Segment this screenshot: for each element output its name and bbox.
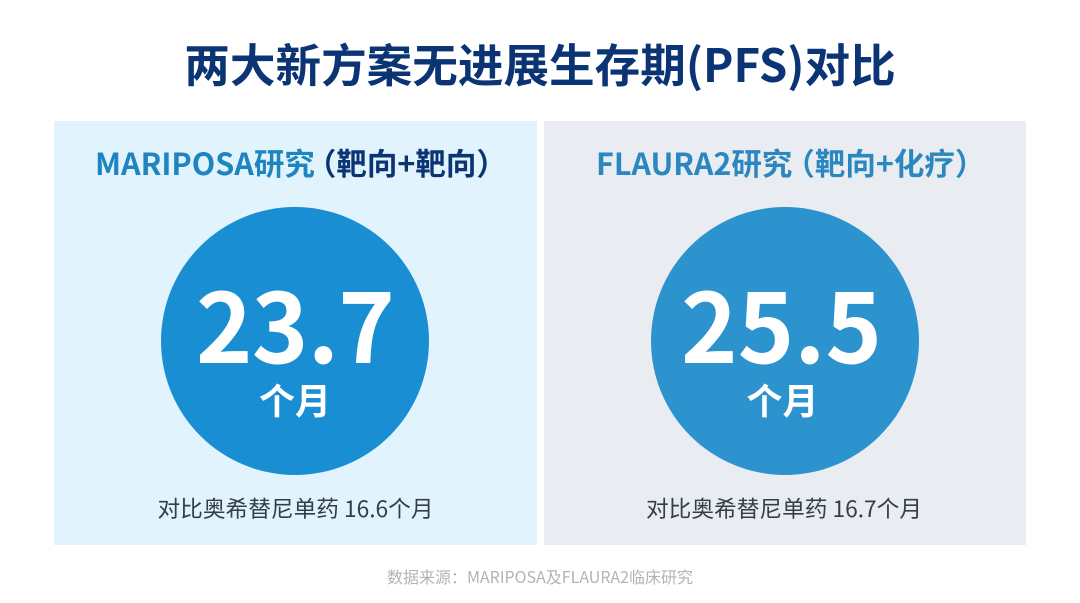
panel: FLAURA2 (544, 121, 1026, 545)
title: 两大新方案无进展生存期(PFS)对比 (184, 30, 896, 96)
panel: MARIPOSA (54, 121, 537, 545)
panel heading: FLAURA2: FLAURA2研究（靶向+化疗） (596, 140, 985, 184)
unit: 个月 (746, 373, 818, 425)
value: 25.5: 25.5 (681, 252, 882, 391)
unit: 个月 (259, 373, 331, 425)
stat circle: 23.7 months (161, 207, 429, 475)
value: 23.7: 23.7 (196, 252, 394, 391)
panel heading: MARIPOSA: MARIPOSA研究（靶向+靶向） (95, 140, 507, 184)
stat circle: 25.5 months (650, 207, 918, 475)
source note: 数据来源：MARIPOSA及FLAURA2临床研究 (387, 564, 693, 588)
comparison note: 对比奥希替尼单药 16.6个月 (157, 491, 434, 524)
comparison note: 对比奥希替尼单药 16.7个月 (646, 491, 922, 524)
